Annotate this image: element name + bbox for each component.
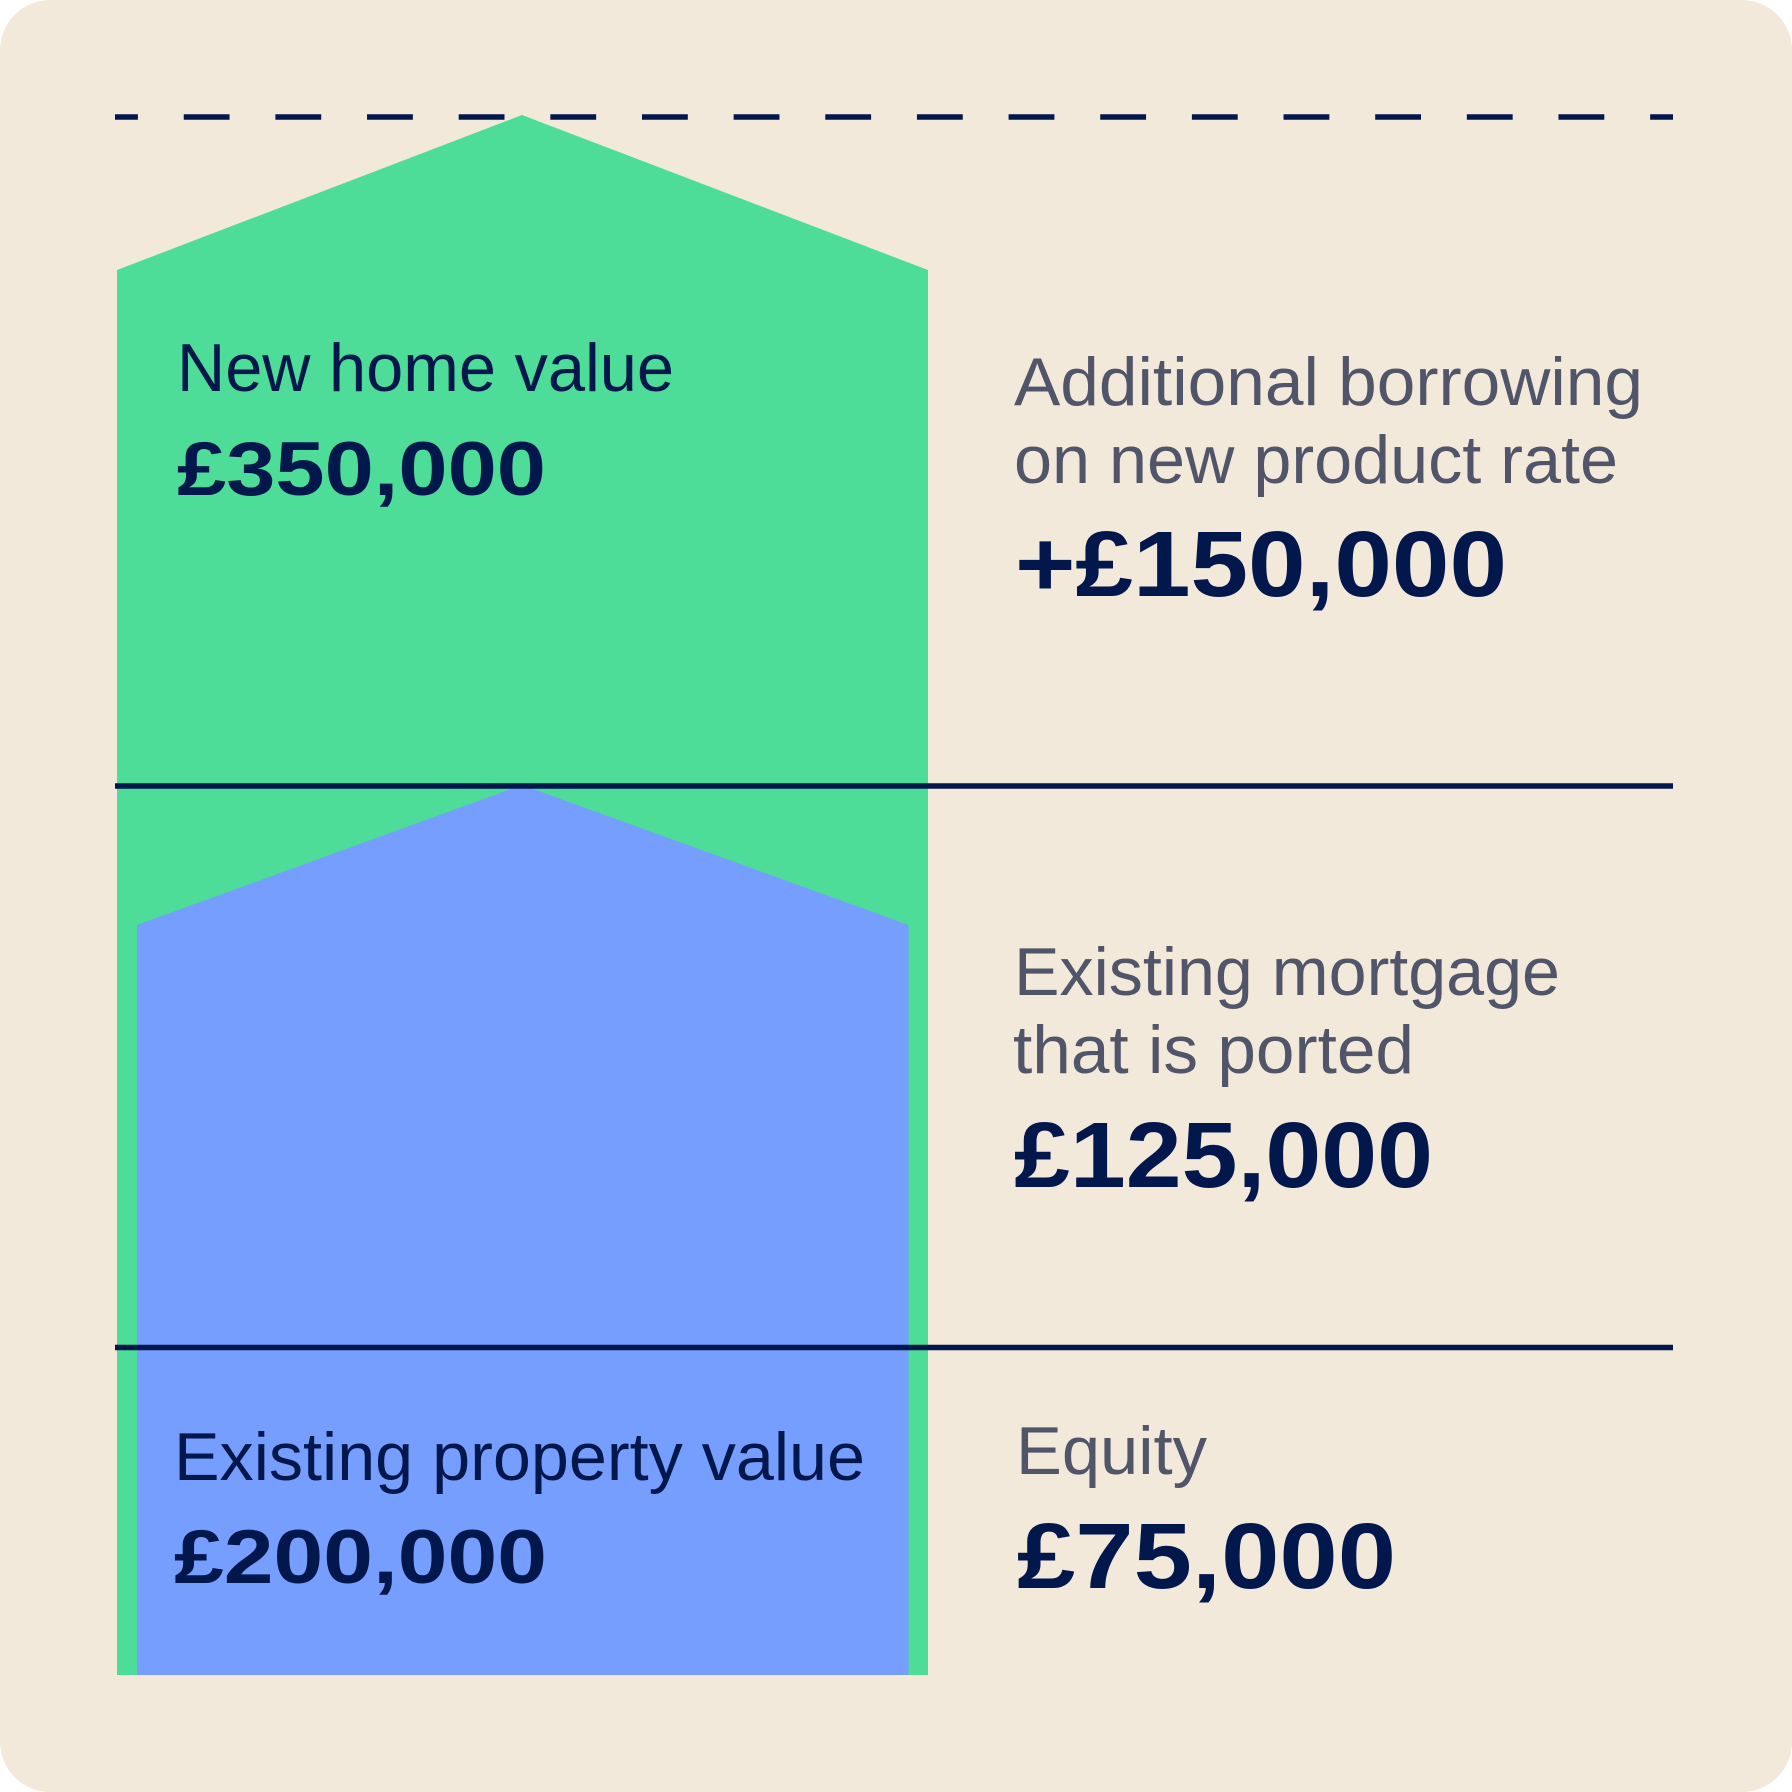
- label: new home value: [177, 330, 674, 512]
- label: additional borrowing: on new product rate: [1014, 422, 1618, 498]
- divider line: existing value: [115, 1345, 1673, 1350]
- label: equity: £75,000: [1017, 1504, 1396, 1608]
- label: existing mortgage: Existing mortgage: [1014, 934, 1560, 1010]
- existing property shape: [137, 785, 908, 1675]
- label: existing property value: £200,000: [174, 1515, 547, 1600]
- new home shape: [117, 115, 928, 1675]
- label: existing mortgage: that is ported: [1013, 1012, 1414, 1088]
- label: equity: [1016, 1413, 1396, 1608]
- label: new home value: New home value: [177, 330, 674, 406]
- label: existing property value: [174, 1419, 865, 1600]
- label: new home value: £350,000: [177, 427, 546, 512]
- divider line: new value: [115, 783, 1673, 789]
- label: equity: Equity: [1016, 1413, 1207, 1489]
- label: existing mortgage: [1013, 934, 1560, 1207]
- label: additional borrowing: [1014, 344, 1643, 616]
- label: existing mortgage: £125,000: [1014, 1103, 1433, 1207]
- label: additional borrowing: +£150,000: [1015, 512, 1507, 616]
- label: existing property value: Existing property value: [174, 1419, 865, 1495]
- label: additional borrowing: Additional borrowing: [1014, 344, 1643, 420]
- dashed top line: [115, 114, 1673, 120]
